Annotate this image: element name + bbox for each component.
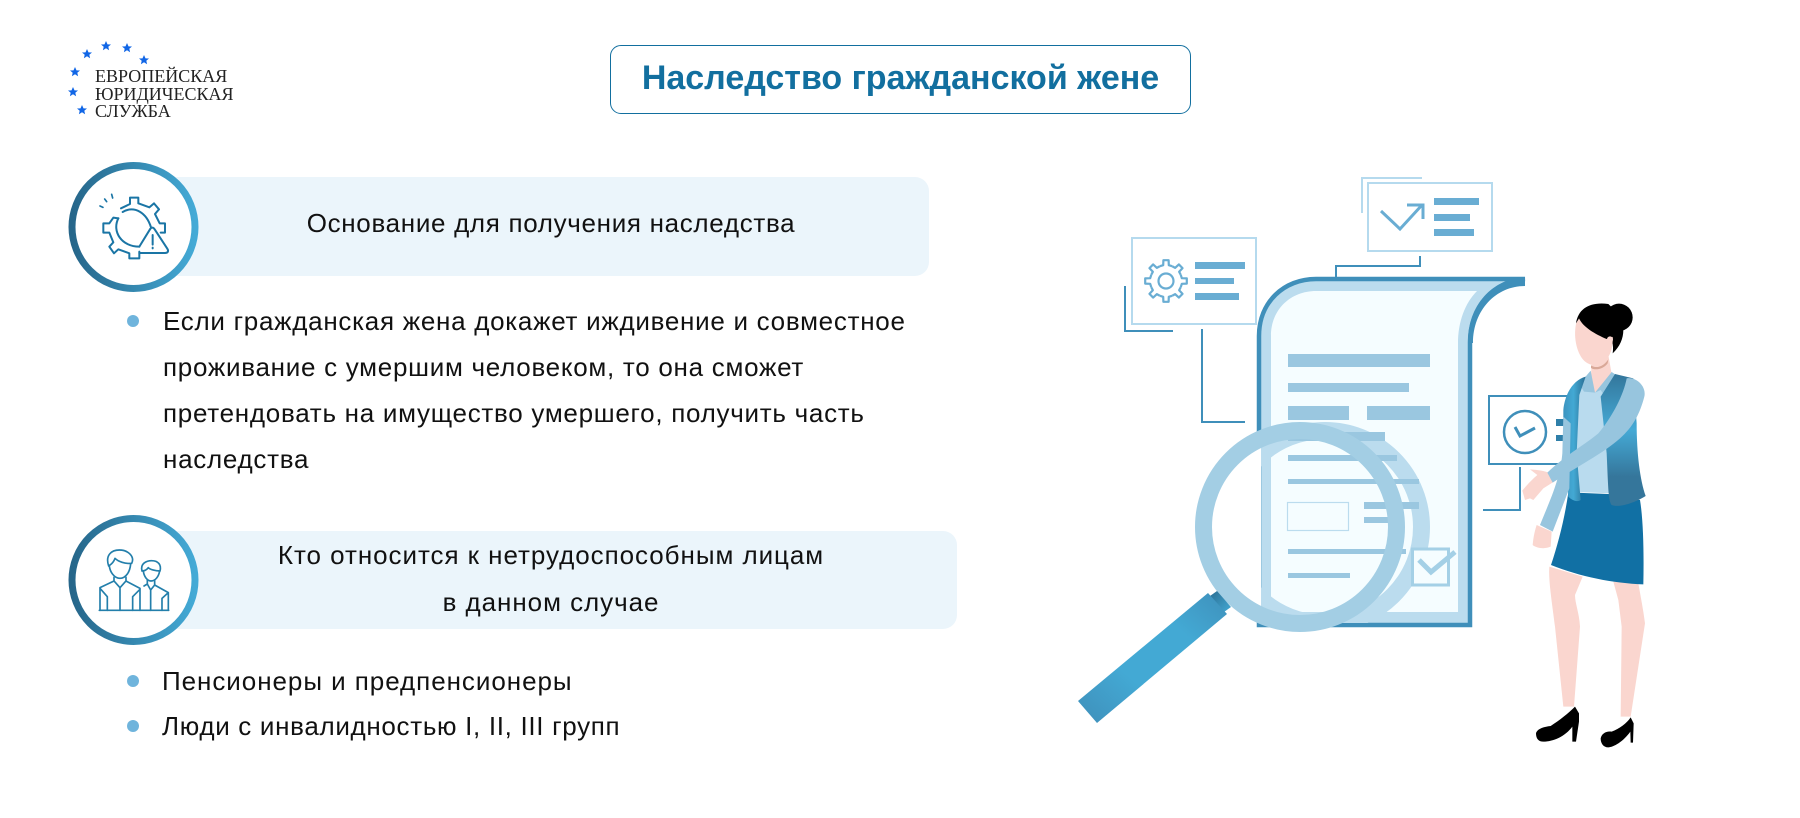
logo text <box>95 66 234 121</box>
collar <box>1579 371 1595 393</box>
panel: heading bar two background <box>160 531 957 629</box>
logo text: СЛУЖБА <box>95 101 171 121</box>
logo text: ЮРИДИЧЕСКАЯ <box>95 84 234 104</box>
hand and arm skin <box>1522 469 1554 500</box>
page <box>68 41 1646 748</box>
shirt <box>1575 373 1617 493</box>
vest <box>1563 377 1586 501</box>
illustration: callout card with clock <box>1483 396 1579 510</box>
heading: disabled persons <box>278 540 824 617</box>
illustration: magnifying glass <box>1078 420 1396 723</box>
text: pensioners: Пенсионеры и предпенсионеры <box>162 666 573 696</box>
text block: first bullet paragraph: Если гражданская жена докажет иждивение и совместное <box>163 306 906 336</box>
lens shadow ring on the page <box>1228 430 1422 624</box>
heading: disabled persons: в данном случае <box>443 587 659 617</box>
text block: first bullet paragraph: претендовать на имущество умершего, получить часть <box>163 398 865 428</box>
illustration: document <box>1228 277 1525 625</box>
bullet one <box>127 315 139 327</box>
face <box>1575 315 1613 365</box>
bullet: disabled groups <box>127 720 139 732</box>
icon: gear with warning triangle in ring <box>72 166 195 288</box>
document text lines <box>1288 354 1430 578</box>
title: Наследство гражданской жене <box>642 59 1159 97</box>
bullet: pensioners <box>127 675 139 687</box>
hair <box>1605 304 1633 331</box>
skirt <box>1551 492 1644 584</box>
title <box>610 45 1191 114</box>
heading: basis for inheritance: Основание для получения наследства <box>307 208 795 238</box>
icon: two people in ring <box>72 518 195 642</box>
text block: first bullet paragraph: наследства <box>163 444 309 474</box>
shoes <box>1536 707 1579 742</box>
illustration: callout card with check arrow <box>1336 178 1492 277</box>
illustration and icons <box>68 41 1646 748</box>
text block: first bullet paragraph: проживание с умершим человеком, то она сможет <box>163 352 804 382</box>
heading: disabled persons: Кто относится к нетрудоспособным лицам <box>278 540 824 570</box>
logo text: ЕВРОПЕЙСКАЯ <box>95 66 227 86</box>
text block: first bullet paragraph <box>163 306 906 474</box>
document checkbox <box>1412 549 1455 585</box>
panel: heading bar one background <box>160 177 929 276</box>
text: disabled groups: Люди с инвалидностью I, II, III групп <box>162 711 620 741</box>
sleeves <box>1540 417 1571 532</box>
logo stars <box>68 41 149 114</box>
illustration: woman <box>1522 304 1646 747</box>
illustration: callout card with gear <box>1125 238 1256 422</box>
legs <box>1549 567 1583 707</box>
neck <box>1591 355 1612 393</box>
